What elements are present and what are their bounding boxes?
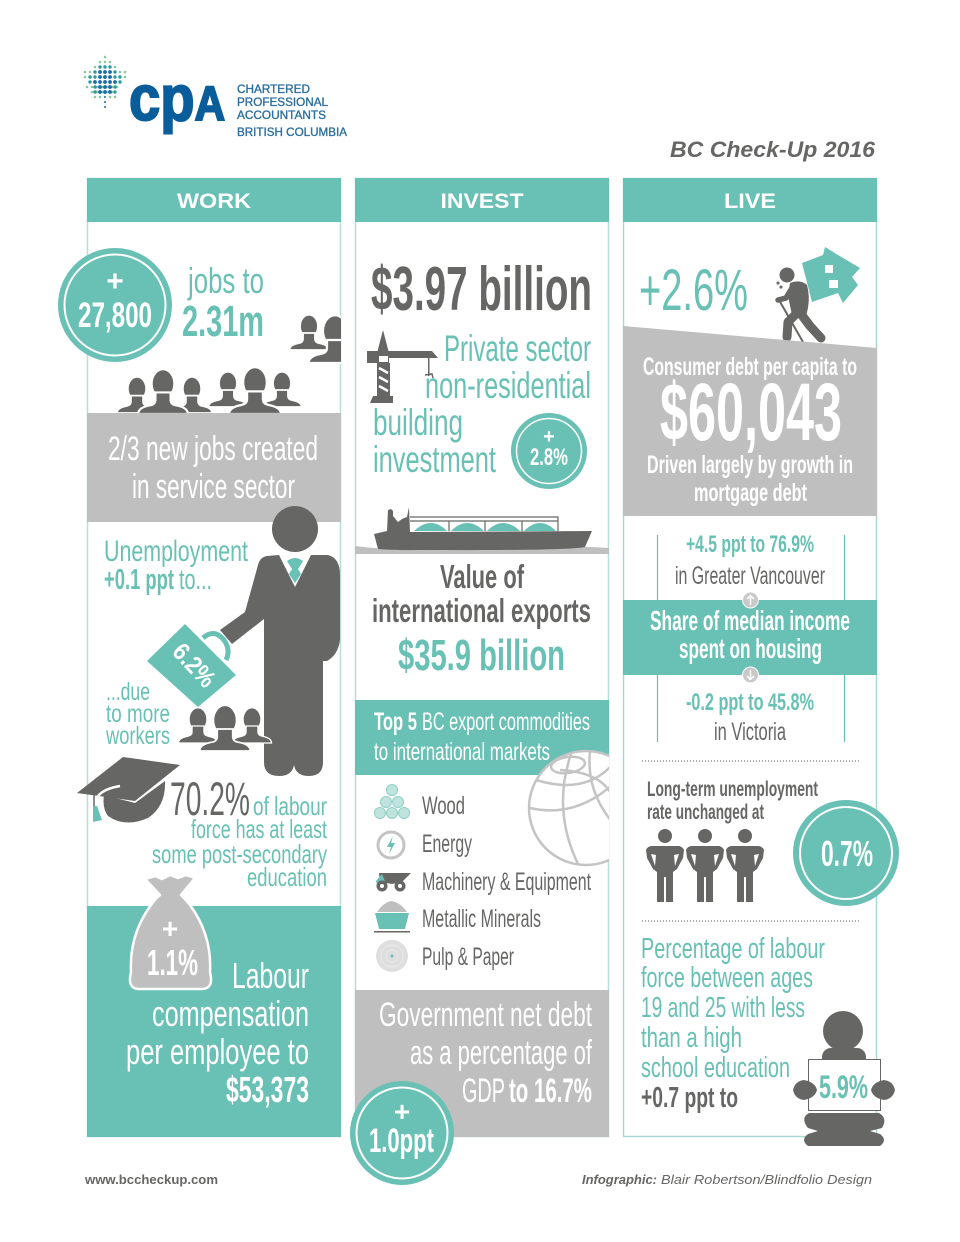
text: unemployment: Unemployment: [104, 535, 248, 568]
report title: BC Check-Up 2016: [670, 137, 876, 162]
text: jobs to 2.31m: 2.31m: [182, 297, 264, 346]
text: unemployment: to...: [179, 564, 212, 596]
panel: labour compensation: [87, 875, 341, 1137]
panel: consumer debt: Driven largely by growth in: [647, 451, 853, 479]
text: due to more workers: ...due: [106, 678, 150, 706]
icon: briefcase 6.2%: [147, 624, 236, 707]
icon: up arrow: [742, 592, 758, 608]
text: private sector investment: building: [373, 402, 463, 443]
heading: live: [623, 178, 877, 222]
text: due to more workers: to more: [106, 700, 170, 728]
icon: seated child with sign: 5.9%: [819, 1069, 868, 1105]
text: long-term unemployment: Long-term unemployment: [647, 778, 818, 801]
text: due to more workers: [105, 678, 170, 750]
panel: top 5 heading: Top 5: [374, 708, 417, 736]
text: unemployment: [104, 535, 248, 596]
panel: service sector jobs: in service sector: [132, 468, 295, 506]
badge: 2.8%: 2.8%: [530, 444, 568, 471]
icon: energy bolt: [378, 832, 404, 858]
logo: CPA British Columbia: CHARTERED: [237, 82, 310, 96]
text: labour compensation: $53,373: [226, 1069, 309, 1110]
icon: money bag: 1.1%: [147, 942, 198, 983]
icon: businessman: [220, 506, 340, 776]
text: labour compensation: compensation: [152, 993, 309, 1034]
text: private sector investment: investment: [373, 439, 496, 480]
heading: live: LIVE: [724, 190, 776, 213]
text: labour force education: [641, 933, 825, 1114]
badge: 1.0 ppt: 1.0ppt: [369, 1122, 434, 1160]
text: 70.2% post-secondary: of labour: [253, 791, 327, 821]
text: labour force education: Percentage of labour: [641, 933, 825, 965]
label: pulp and paper: Pulp & Paper: [422, 943, 514, 971]
text: private sector investment: [373, 328, 591, 480]
panel: top 5 heading: to international markets: [374, 738, 550, 766]
icon: three workers: [178, 705, 272, 751]
text: 70.2% post-secondary: force has at least: [191, 814, 328, 844]
column outline: [356, 178, 608, 1136]
panel: share of income on housing: [623, 600, 877, 675]
logo: CPA British Columbia: cpA: [129, 62, 225, 134]
heading: invest: [355, 178, 609, 222]
panel: service sector jobs: 2/3 new jobs created: [108, 430, 318, 468]
column outline: [88, 178, 340, 1136]
icon: house on back: [802, 247, 860, 303]
text: labour force education: than a high: [641, 1022, 742, 1054]
text: victoria: [658, 675, 844, 746]
icon: cargo ship: [355, 507, 609, 554]
text: jobs to 2.31m: [182, 260, 264, 346]
icon: globe: [528, 750, 609, 866]
text: long-term unemployment: [647, 778, 818, 824]
badge: 27,800 jobs: +: [106, 265, 124, 298]
label: machinery: Machinery & Equipment: [422, 868, 591, 896]
icon: hiker: [778, 268, 821, 342]
badge: 1.0 ppt: [350, 1081, 454, 1185]
footer: credit: Infographic:: [582, 1172, 657, 1187]
icon: money bag: +: [162, 913, 178, 944]
badge: 27,800 jobs: [58, 248, 172, 362]
logo: CPA British Columbia: [85, 57, 347, 139]
text: value of international exports: Value of: [440, 558, 525, 595]
panel: top 5 heading: BC export commodities: [422, 708, 590, 736]
text: labour compensation: per employee to: [126, 1031, 309, 1072]
panel: live: [623, 178, 899, 1146]
icon: crane: [367, 330, 438, 403]
icon: briefcase 6.2%: 6.2%: [167, 638, 221, 693]
icon: mine cart: [374, 901, 410, 932]
text: due to more workers: workers: [105, 722, 170, 750]
text: labour force education: force between ages: [641, 962, 813, 994]
text: 70.2% post-secondary: 70.2%: [170, 772, 250, 825]
logo: CPA British Columbia: BRITISH COLUMBIA: [237, 125, 347, 139]
text: private sector investment: Private sector: [444, 328, 591, 369]
badge: 1.0 ppt: +: [394, 1096, 410, 1127]
icon: money bag: [130, 875, 211, 989]
badge: 2.8%: [511, 413, 587, 489]
panel: work: [58, 178, 361, 1137]
icon: graduation cap: [77, 757, 180, 823]
stat: $3.97 billion: $3.97 billion: [371, 255, 592, 324]
panel: consumer debt: [623, 326, 877, 516]
label: metallic minerals: Metallic Minerals: [422, 905, 541, 933]
text: unemployment: +0.1 ppt: [104, 564, 174, 596]
panel: service sector jobs: [87, 413, 341, 522]
text: value of international exports: [372, 558, 591, 680]
text: greater vancouver: [658, 531, 844, 600]
stat: +2.6%: +2.6%: [639, 258, 748, 323]
text: jobs to 2.31m: jobs to: [187, 260, 264, 301]
footer: credit: Blair Robertson/Blindfolio Design: [661, 1172, 872, 1187]
heading: work: [87, 178, 341, 222]
footer: website: www.bccheckup.com: [84, 1172, 218, 1187]
text: labour force education: 19 and 25 with less: [641, 992, 805, 1024]
text: value of international exports: international exports: [372, 592, 591, 629]
text: greater vancouver: +4.5 ppt to 76.9%: [686, 531, 814, 558]
logo: CPA British Columbia: ACCOUNTANTS: [237, 108, 326, 122]
column outline: [624, 178, 876, 1136]
badge: 0.7%: 0.7%: [821, 833, 873, 874]
panel: government net debt: to 16.7%: [509, 1072, 592, 1110]
panel: share of income on housing: spent on housing: [679, 633, 822, 664]
panel: invest: [350, 178, 610, 1185]
text: private sector investment: non-residential: [425, 365, 591, 406]
icon: down arrow: [742, 667, 758, 683]
badge: 0.7%: [793, 800, 899, 906]
panel: consumer debt: $60,043: [660, 367, 842, 458]
panel: government net debt: GDP: [462, 1072, 505, 1110]
logo: CPA British Columbia: PROFESSIONAL: [237, 95, 328, 109]
text: labour force education: +0.7 ppt to: [641, 1082, 738, 1114]
panel: consumer debt: mortgage debt: [694, 479, 807, 507]
icon: crowd of workers: [117, 315, 361, 414]
text: 70.2% post-secondary: [152, 772, 328, 892]
icon: dump truck: [376, 873, 411, 892]
text: labour force education: school education: [641, 1052, 790, 1084]
panel: government net debt: as a percentage of: [410, 1034, 592, 1072]
heading: work: WORK: [177, 190, 251, 213]
badge: 2.8%: +: [543, 426, 555, 448]
footer: credit: [582, 1172, 872, 1187]
heading: invest: INVEST: [440, 190, 524, 213]
panel: top 5 heading: [355, 700, 609, 775]
text: long-term unemployment: rate unchanged at: [647, 801, 764, 824]
text: victoria: -0.2 ppt to 45.8%: [686, 689, 814, 716]
panel: government net debt: [355, 990, 609, 1137]
text: labour compensation: [126, 955, 309, 1110]
icon: wood logs: [374, 784, 410, 818]
text: victoria: in Victoria: [714, 718, 786, 746]
text: 70.2% post-secondary: education: [247, 862, 327, 892]
icon: paper roll: [376, 940, 408, 972]
icon: three men: [646, 829, 764, 902]
label: energy: Energy: [422, 830, 472, 858]
icon: seated child with sign: [793, 1011, 895, 1146]
text: greater vancouver: in Greater Vancouver: [675, 562, 825, 590]
label: wood: Wood: [422, 792, 465, 820]
text: labour compensation: Labour: [232, 955, 309, 996]
badge: 27,800 jobs: 27,800: [78, 296, 152, 335]
text: 70.2% post-secondary: some post-secondary: [152, 839, 327, 869]
text: value of international exports: $35.9 billion: [398, 631, 565, 680]
panel: government net debt: Government net debt: [379, 996, 592, 1034]
